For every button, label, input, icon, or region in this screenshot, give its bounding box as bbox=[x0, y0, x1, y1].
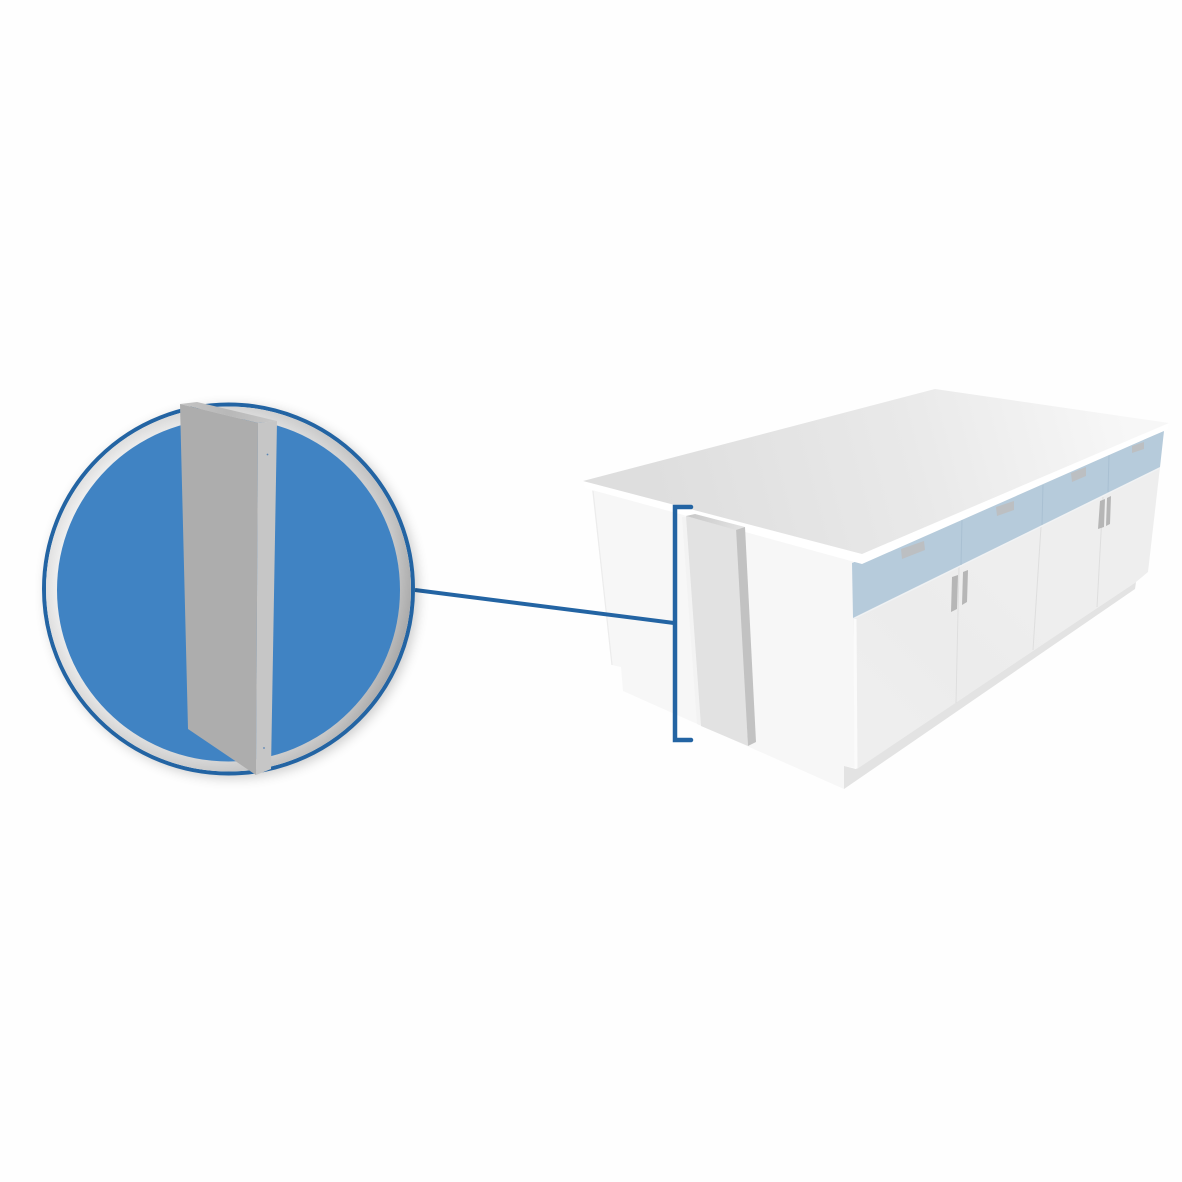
panel top bbox=[180, 402, 277, 423]
callout bracket bbox=[675, 507, 691, 740]
countertop bbox=[583, 389, 1169, 554]
drawer handles bbox=[901, 541, 925, 559]
cabinet island bbox=[583, 389, 1169, 789]
screw holes bbox=[267, 454, 268, 455]
cabinet doors bbox=[853, 467, 1160, 769]
detail circle bbox=[44, 402, 418, 778]
end panel bbox=[682, 514, 756, 746]
inner shaded ring bbox=[46, 406, 411, 772]
callout leader line bbox=[415, 590, 674, 623]
panel face bbox=[180, 404, 258, 775]
door handles bbox=[951, 496, 1111, 612]
drawer band bbox=[852, 431, 1164, 619]
enlarged panel bbox=[180, 402, 277, 775]
left end face bbox=[592, 490, 855, 789]
toe kick bbox=[844, 582, 1136, 789]
blue disc bbox=[57, 418, 400, 762]
countertop edge bbox=[583, 423, 1169, 564]
panel side bbox=[256, 421, 277, 775]
outer ring bbox=[44, 404, 413, 774]
outer shadow bbox=[46, 406, 418, 778]
end seam bbox=[593, 491, 612, 665]
